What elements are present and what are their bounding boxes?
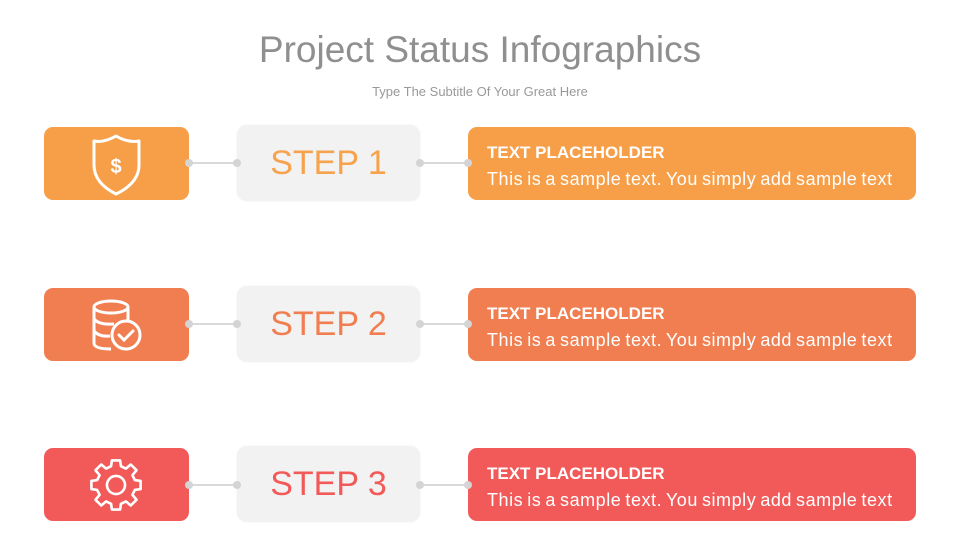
text box <box>468 448 916 521</box>
text box: TEXT PLACEHOLDER <box>487 304 665 323</box>
connectors <box>185 481 472 489</box>
row 2 <box>44 286 916 362</box>
step label: STEP 3 <box>270 465 387 503</box>
connectors <box>185 159 472 167</box>
text box <box>468 127 916 200</box>
step label <box>237 286 420 362</box>
icon box: gear <box>44 448 189 521</box>
icon box: database check <box>44 288 189 361</box>
connectors <box>185 320 472 328</box>
text box <box>468 288 916 361</box>
icon box: shield dollar: $ <box>110 156 122 178</box>
text box: TEXT PLACEHOLDER <box>487 464 665 483</box>
step label <box>237 446 420 522</box>
step label: STEP 2 <box>270 305 387 343</box>
title: Project Status Infographics <box>259 29 701 70</box>
text box: This is a sample text. You simply add sample text <box>487 490 893 510</box>
subtitle: Type The Subtitle Of Your Great Here <box>372 84 588 99</box>
step label: STEP 1 <box>270 144 387 182</box>
icon box: shield dollar <box>44 127 189 200</box>
step label <box>237 125 420 201</box>
text box: This is a sample text. You simply add sample text <box>487 169 893 189</box>
text box: TEXT PLACEHOLDER <box>487 143 665 162</box>
text box: This is a sample text. You simply add sample text <box>487 330 893 350</box>
row 1 <box>44 125 916 201</box>
